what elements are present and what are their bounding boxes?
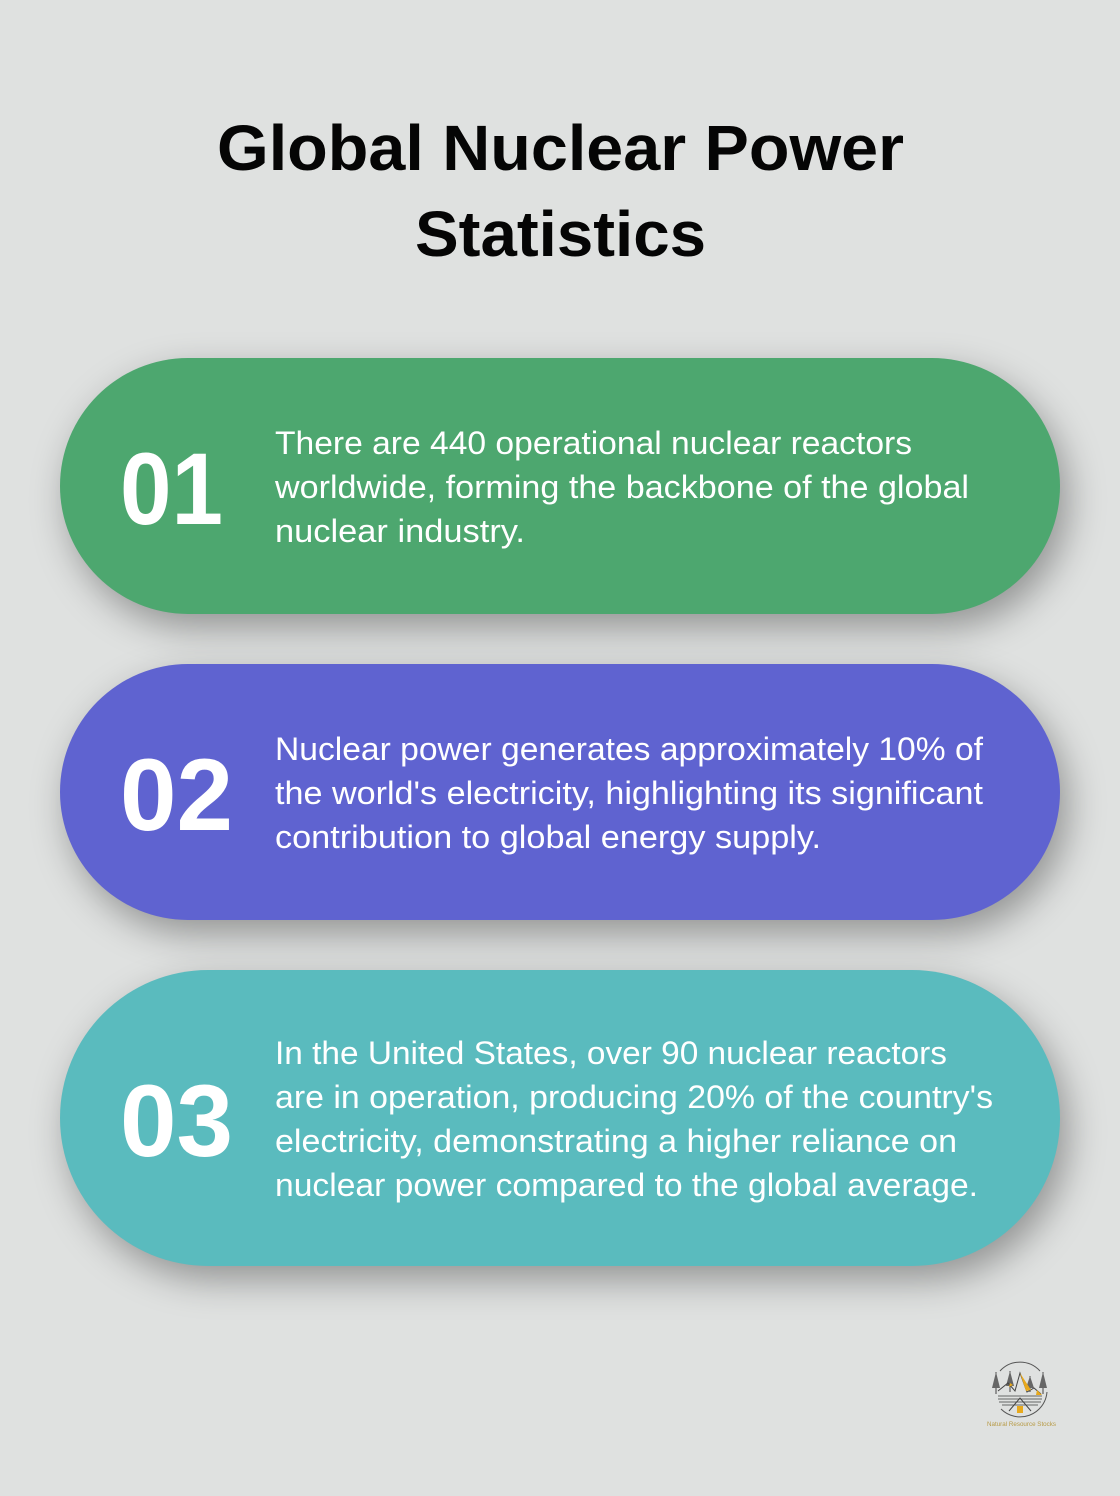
icon: Natural Resource Stocks logo: Natural Resource Stocks — [987, 1421, 1057, 1428]
text: card 01: worldwide, forming the backbone of the global — [274, 469, 969, 505]
panel: card 03 background — [60, 970, 1060, 1266]
text: card 03: In the United States, over 90 nuclear reactors — [275, 1035, 947, 1071]
title — [217, 112, 904, 270]
number 02: 02 — [120, 738, 233, 852]
text: card 02: the world's electricity, highlighting its significant — [275, 775, 983, 811]
text: card 01: nuclear industry. — [275, 513, 525, 549]
number 01: 01 — [120, 432, 223, 546]
panel: card 02 background — [60, 664, 1060, 920]
text: card 03: nuclear power compared to the global average. — [275, 1167, 978, 1203]
text: card 02: contribution to global energy supply. — [275, 819, 821, 855]
text: card 03: are in operation, producing 20% of the country's — [275, 1079, 993, 1115]
icon: Natural Resource Stocks logo — [987, 1362, 1057, 1428]
text: card 03: electricity, demonstrating a higher reliance on — [275, 1123, 957, 1159]
text: card 01 — [274, 425, 969, 549]
title: Statistics — [415, 198, 706, 270]
title: Global Nuclear Power — [217, 112, 904, 184]
number 03: 03 — [120, 1064, 233, 1178]
text: card 01: There are 440 operational nuclear reactors — [275, 425, 912, 461]
text: card 02 — [275, 731, 983, 855]
text: card 02: Nuclear power generates approximately 10% of — [275, 731, 983, 767]
panel: card 01 background — [60, 358, 1060, 614]
text: card 03 — [275, 1035, 993, 1203]
